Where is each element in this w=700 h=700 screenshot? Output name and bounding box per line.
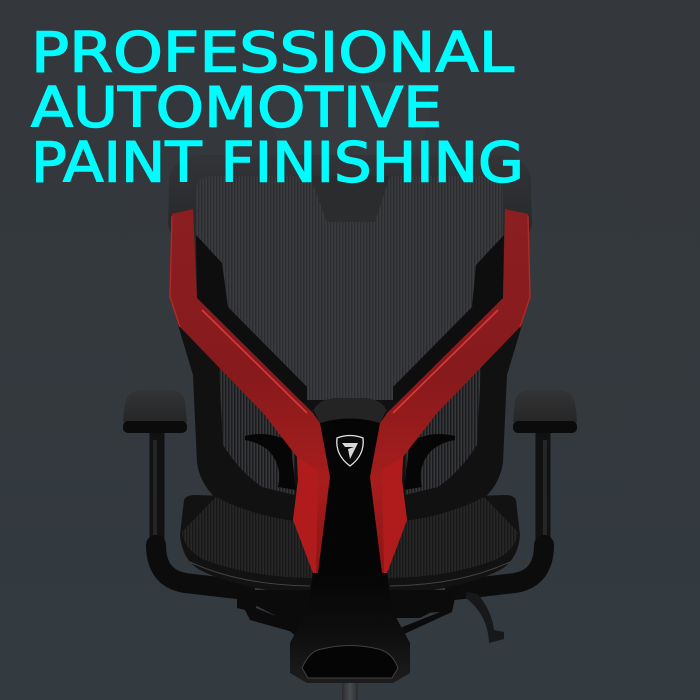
upper back frame: [168, 155, 532, 300]
seat mesh: [182, 497, 518, 578]
seat shell: [180, 495, 520, 595]
mechanism plate: [243, 590, 458, 618]
headrest mount: [310, 176, 390, 222]
right arm highlight: [393, 310, 498, 413]
shield mark: [342, 443, 358, 459]
right arm post highlight: [543, 440, 547, 535]
left arm edge light: [170, 216, 180, 327]
right arm support: [455, 545, 544, 590]
right black side strip: [393, 235, 504, 402]
left arm pad: [123, 390, 187, 422]
hub: [313, 398, 387, 423]
title line 3: PAINT FINISHING: [31, 130, 524, 194]
seat front rim highlight: [190, 562, 510, 586]
left arm post: [150, 430, 164, 545]
right arm edge light: [520, 216, 530, 327]
left arm pad base: [123, 421, 187, 433]
left black side strip: [196, 235, 307, 402]
right red arm: [370, 209, 530, 573]
chair: [123, 82, 577, 700]
left arm highlight: [202, 310, 307, 413]
right arm pad base: [513, 421, 577, 433]
shield outline: [337, 436, 363, 466]
right linkage: [395, 598, 455, 634]
title: [31, 20, 524, 194]
left tilt bracket: [245, 434, 296, 490]
under-seat mechanism: [237, 590, 504, 643]
right arm body: [370, 209, 530, 573]
left linkage: [237, 595, 310, 640]
back mesh: [196, 176, 503, 408]
central spine: [313, 400, 387, 573]
lower right mesh: [405, 368, 481, 495]
lower back frame: [178, 325, 522, 521]
right arm pad: [513, 390, 577, 422]
right arm post: [536, 430, 550, 545]
left arm post highlight: [153, 440, 157, 535]
central stem: [290, 572, 410, 683]
left armrest: [123, 390, 245, 590]
seat: [180, 495, 520, 595]
title line 1: PROFESSIONAL: [31, 20, 514, 84]
lower left mesh: [219, 368, 295, 495]
headrest: [268, 82, 432, 172]
chair post: [342, 678, 358, 700]
title line 2: AUTOMOTIVE: [31, 76, 442, 140]
left arm support: [156, 545, 245, 590]
stem opening: [302, 646, 398, 678]
right armrest: [455, 390, 577, 590]
right arm lower facet: [382, 457, 407, 573]
left arm lower facet: [293, 457, 318, 573]
tilt lever: [466, 592, 504, 643]
shield logo: [337, 436, 363, 466]
right tilt bracket: [404, 434, 455, 490]
left arm body: [170, 209, 330, 573]
left red arm: [170, 209, 330, 573]
